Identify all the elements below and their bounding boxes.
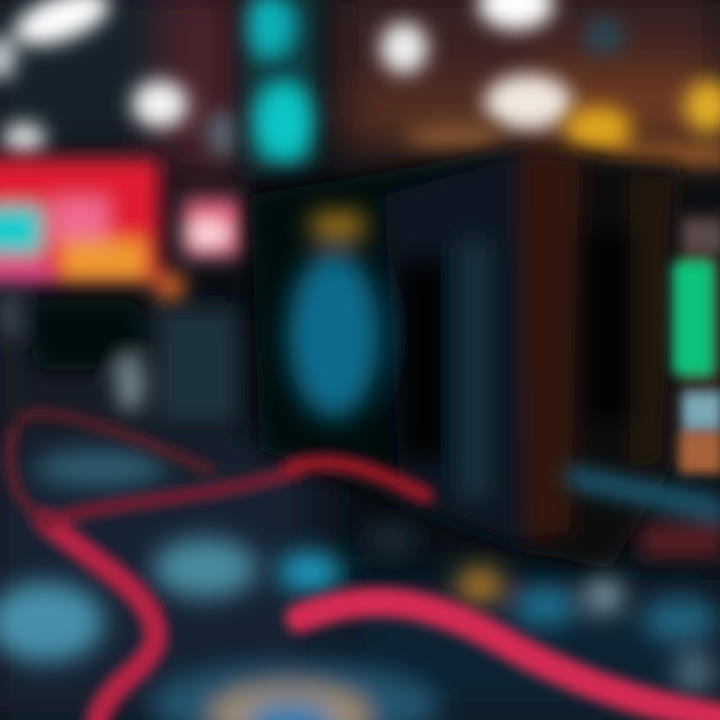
PC tower <box>250 150 680 570</box>
desk blue bar right <box>565 465 720 558</box>
warm lights right <box>405 80 720 164</box>
floor blue patches <box>0 450 718 692</box>
left shelf dark forms <box>0 292 236 420</box>
right green screen <box>672 212 720 474</box>
red cables <box>9 414 720 720</box>
floor disc <box>150 663 440 720</box>
neon sign left <box>0 158 242 302</box>
teal ceiling screen <box>244 0 316 170</box>
tower detail <box>288 214 626 500</box>
ceiling lights <box>0 0 624 158</box>
